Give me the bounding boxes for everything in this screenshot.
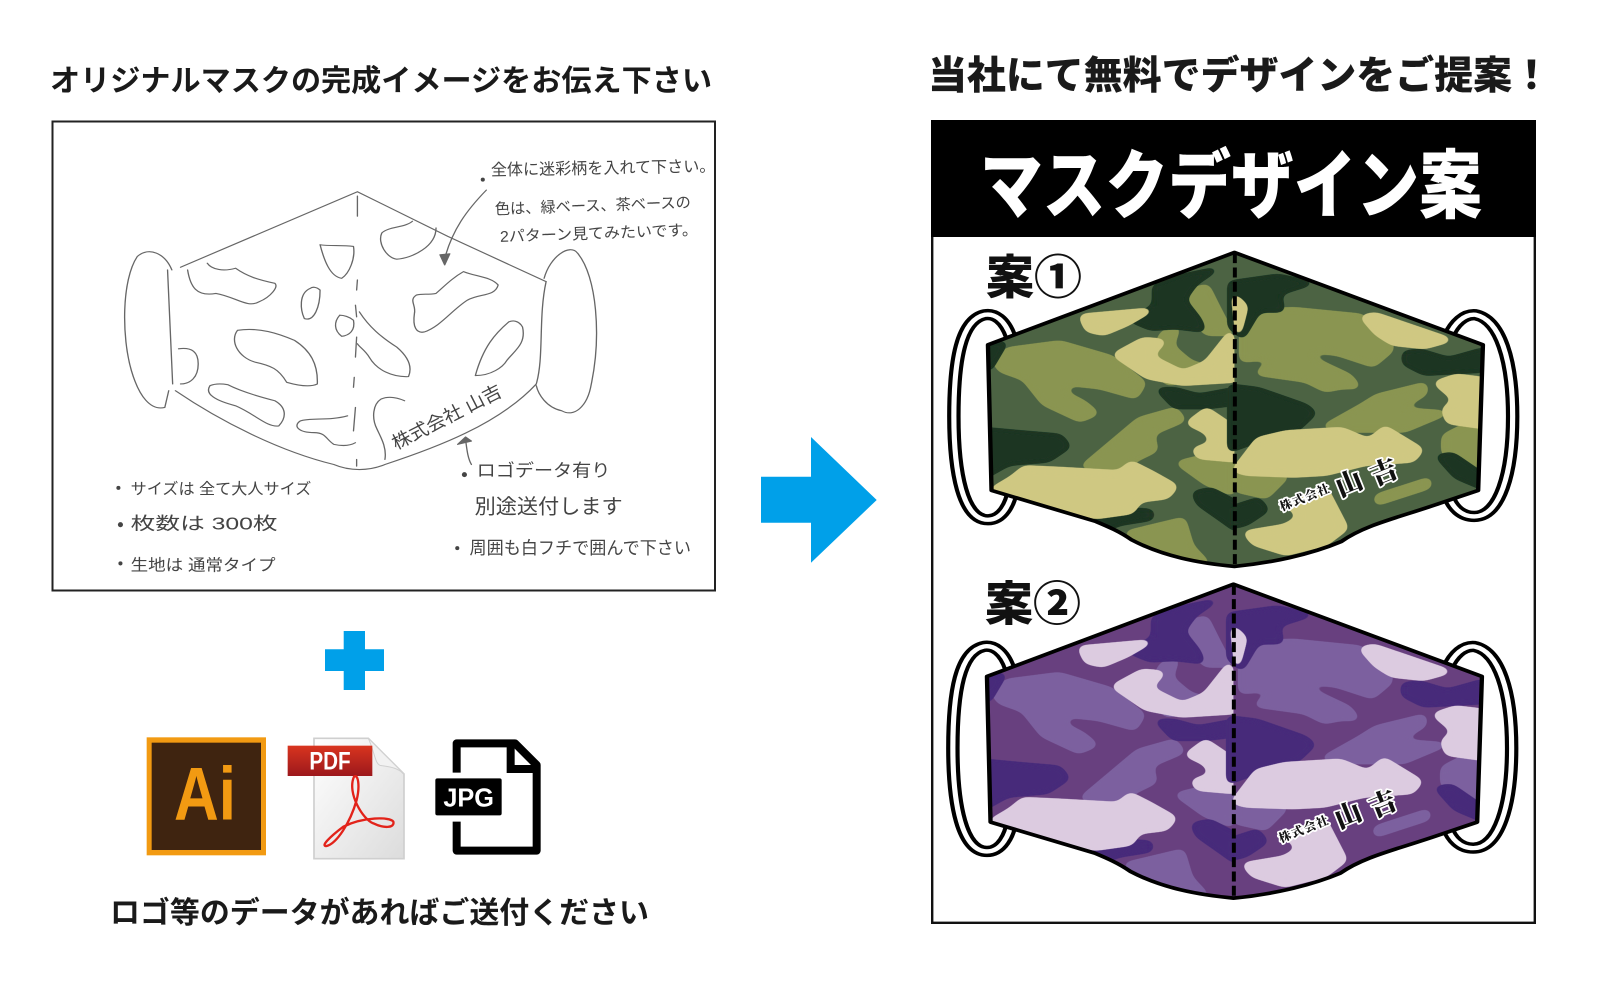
icon: Ai: Ai [174, 751, 236, 835]
panel title: マスクデザイン案 [980, 144, 1482, 228]
sketch: handwritten notes: サイズは 全て大人サイズ [131, 481, 311, 498]
icon: JPG [435, 743, 537, 851]
panel: mask design proposals [931, 120, 1536, 923]
sketch: handwritten notes: 生地は 通常タイプ [131, 557, 276, 575]
design 1 [954, 246, 1513, 573]
company logo: 株式会社 [1277, 812, 1330, 845]
sketch: handwritten notes: 2パターン見てみたいです。 [500, 222, 698, 246]
sketch: handwritten notes: 別途送付します [475, 495, 623, 518]
company logo [1277, 784, 1401, 845]
heading: left: オリジナルマスクの完成イメージをお伝え下さい [50, 65, 712, 98]
icon: JPG: JPG [443, 783, 494, 813]
file format icons [147, 737, 537, 859]
company logo: 山 [1331, 465, 1367, 503]
design 2 label: 案② [985, 578, 1081, 631]
design 1 label: 案① [986, 251, 1082, 304]
sketch: mask drawing [125, 190, 596, 470]
company logo: 吉 [1365, 784, 1401, 823]
sketch: handwritten notes: 全体に迷彩柄を入れて下さい。 [491, 158, 716, 180]
company logo [1278, 453, 1402, 514]
company logo: 株式会社 [1278, 480, 1331, 514]
icon: plus sign [325, 631, 384, 690]
sketch: handwritten notes: ロゴデータ有り [477, 461, 610, 481]
icon: PDF: PDF [309, 748, 351, 776]
sketch: handwritten notes [116, 158, 716, 575]
sketch: handwritten notes: 枚数は 300枚 [131, 514, 278, 534]
sketch: handwritten notes: 株式会社 山吉 [388, 380, 505, 454]
design 2 [953, 578, 1512, 905]
mask: green camouflage [954, 246, 1513, 573]
panel header [931, 120, 1536, 237]
company logo: 吉 [1366, 453, 1402, 492]
heading: right: 当社にて無料でデザインをご提案！ [928, 54, 1551, 98]
text: logo data request: ロゴ等のデータがあればご送付ください [110, 896, 649, 930]
icon: Ai [147, 737, 266, 855]
sketch: handwritten notes: 周囲も白フチで囲んで下さい [470, 538, 691, 558]
sketch: handwritten notes: 色は、緑ベース、茶ベースの [495, 195, 691, 218]
arrow [761, 437, 877, 563]
icon: PDF [288, 738, 404, 859]
panel: hand-drawn sketch [52, 122, 716, 590]
mask: purple camouflage [953, 578, 1512, 905]
company logo: 山 [1330, 796, 1366, 834]
